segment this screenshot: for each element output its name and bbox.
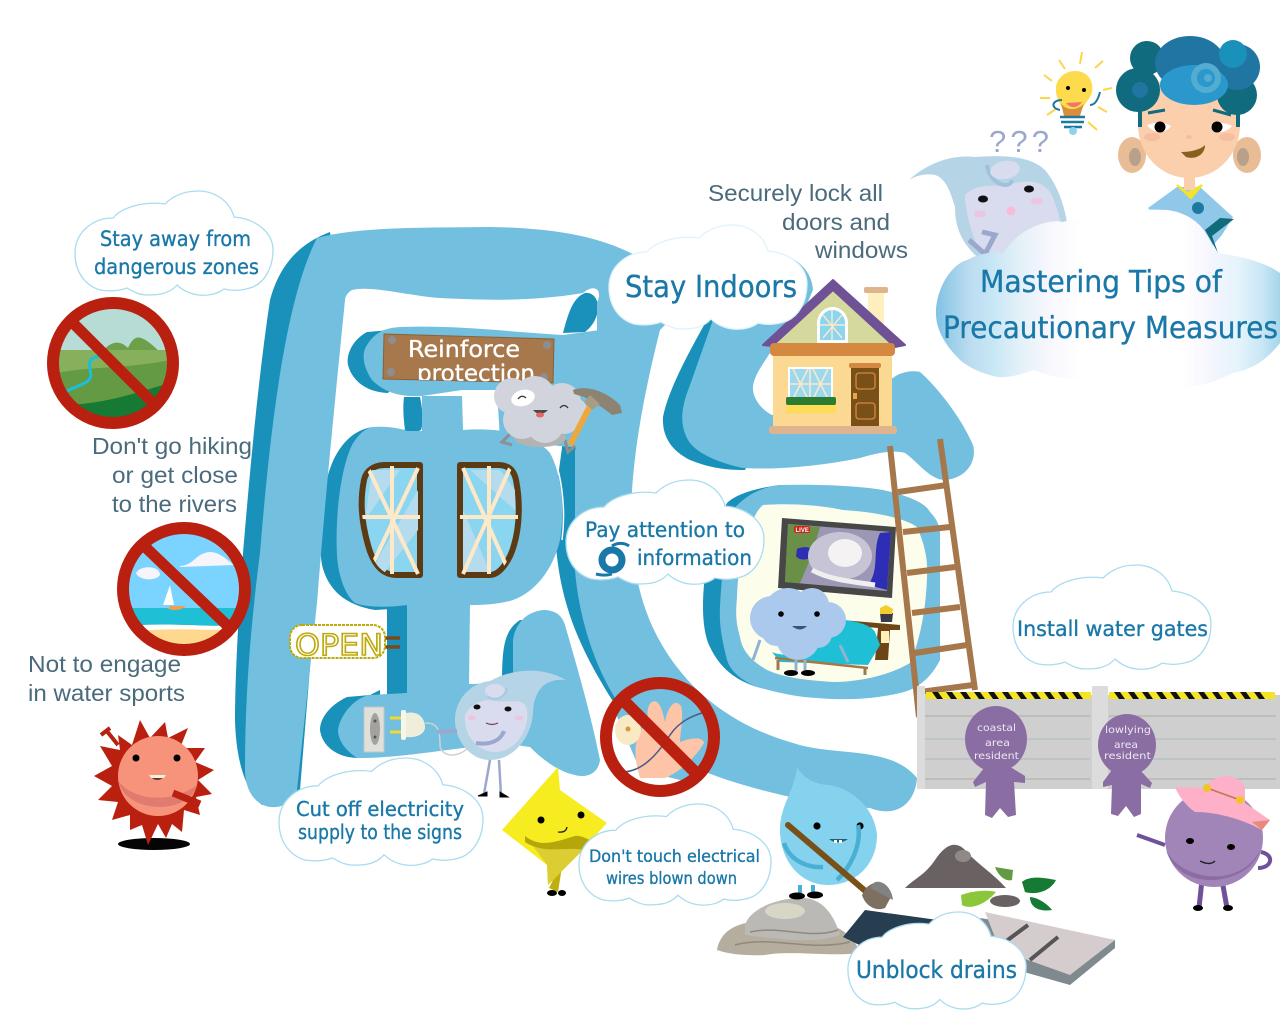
coastal area resident bbox=[965, 706, 1027, 818]
cloud: unblock drains: Unblock drains bbox=[856, 956, 1017, 984]
cloud: install water gates bbox=[1013, 565, 1211, 669]
no sign: do not touch wires bbox=[606, 683, 720, 791]
window left bbox=[362, 465, 420, 575]
text: securely lock all doors and windows: windows bbox=[814, 237, 908, 263]
bed and side table bbox=[772, 605, 900, 675]
boy with blue hair bbox=[1116, 36, 1261, 260]
OPEN neon sign bbox=[290, 625, 400, 662]
light bulb character bbox=[1040, 52, 1112, 135]
cloud: do not touch electrical wires bbox=[579, 804, 771, 905]
cloud: pay attention to information: information bbox=[637, 546, 752, 570]
television with typhoon satellite image: LIVE bbox=[796, 528, 809, 534]
blue cloud character bbox=[750, 588, 848, 676]
lowlying area resident: lowlying bbox=[1105, 725, 1151, 736]
text: not to engage in water sports bbox=[28, 651, 185, 706]
light strokes bbox=[245, 227, 974, 811]
upper-right curl house bbox=[763, 280, 905, 434]
dirt pile and leaves bbox=[905, 845, 1056, 910]
wooden sign: reinforce protection: Reinforce bbox=[408, 337, 520, 363]
cloud: do not touch electrical wires: Don't touch electrical bbox=[589, 847, 760, 867]
text: securely lock all doors and windows: doors and bbox=[782, 209, 890, 235]
lowlying area resident: resident bbox=[1104, 751, 1151, 762]
yellow diamond character bbox=[502, 767, 607, 896]
attic window bbox=[817, 307, 848, 343]
OPEN neon sign: OPEN bbox=[295, 628, 383, 662]
cloud: pay attention to information bbox=[566, 480, 764, 584]
shovel bbox=[788, 825, 893, 909]
cloud: do not touch electrical wires: wires blown down bbox=[606, 869, 737, 889]
text: not to engage in water sports: Not to engage bbox=[28, 651, 181, 677]
cloud: cut off electricity: Cut off electricity bbox=[296, 797, 464, 821]
TV room interior bbox=[736, 504, 927, 682]
icon: typhoon symbol bbox=[596, 543, 629, 575]
text: securely lock all doors and windows bbox=[708, 180, 908, 263]
title cloud: Mastering Tips of bbox=[980, 265, 1223, 300]
cloud: unblock drains bbox=[848, 912, 1026, 1009]
lowlying area resident: area bbox=[1114, 740, 1138, 751]
gray cloud character with hammer bbox=[494, 376, 622, 452]
cloud: stay away from dangerous zones bbox=[75, 191, 273, 295]
text: securely lock all doors and windows: Securely lock all bbox=[708, 180, 883, 206]
ladder bbox=[890, 439, 975, 717]
text: do not go hiking: to the rivers bbox=[112, 491, 237, 517]
text: not to engage in water sports: in water sports bbox=[28, 680, 185, 706]
coastal area resident: coastal bbox=[977, 723, 1016, 734]
lowlying area resident bbox=[1098, 714, 1156, 817]
water drop character with shovel bbox=[780, 767, 893, 909]
no sign: mountains and river bbox=[47, 297, 179, 429]
angry sun character bbox=[94, 720, 214, 850]
cloud: stay away from dangerous zones: dangerous zones bbox=[94, 255, 259, 279]
purple character with pink hat bbox=[1137, 776, 1270, 911]
coastal area resident: resident bbox=[974, 751, 1019, 762]
sandbags bbox=[717, 898, 860, 955]
television with typhoon satellite image bbox=[778, 518, 896, 598]
house window bbox=[786, 367, 836, 413]
coastal area resident: area bbox=[985, 738, 1010, 749]
wind spirit pulling the plug bbox=[437, 671, 566, 797]
window right bbox=[460, 465, 519, 575]
cloud: cut off electricity bbox=[279, 758, 483, 865]
text: do not go hiking: or get close bbox=[112, 462, 238, 488]
text: do not go hiking: Don't go hiking bbox=[92, 433, 252, 459]
door bbox=[849, 363, 881, 426]
text: do not go hiking bbox=[92, 433, 252, 517]
dark shadow strokes bbox=[235, 232, 800, 805]
confused wind spirit bbox=[909, 156, 1069, 270]
socket and plug bbox=[364, 707, 468, 755]
cloud: pay attention to information: Pay attention to bbox=[585, 518, 745, 542]
giant blue wind character bbox=[235, 227, 974, 811]
cloud: install water gates: Install water gates bbox=[1017, 617, 1208, 641]
wooden sign: reinforce protection bbox=[383, 334, 554, 387]
wooden sign: reinforce protection: protection bbox=[417, 361, 535, 387]
title cloud bbox=[936, 210, 1280, 387]
cloud: stay away from dangerous zones: Stay away from bbox=[100, 227, 251, 251]
hammer bbox=[570, 388, 622, 445]
flood gate barrier bbox=[917, 686, 1280, 789]
drain cover and hole bbox=[843, 910, 1115, 985]
question marks: ??? bbox=[989, 124, 1049, 159]
no sign: beach and boat bbox=[118, 522, 250, 660]
cloud: stay indoors bbox=[609, 225, 807, 329]
cloud: cut off electricity: supply to the signs bbox=[298, 820, 462, 844]
cloud: stay indoors: Stay Indoors bbox=[625, 270, 797, 305]
